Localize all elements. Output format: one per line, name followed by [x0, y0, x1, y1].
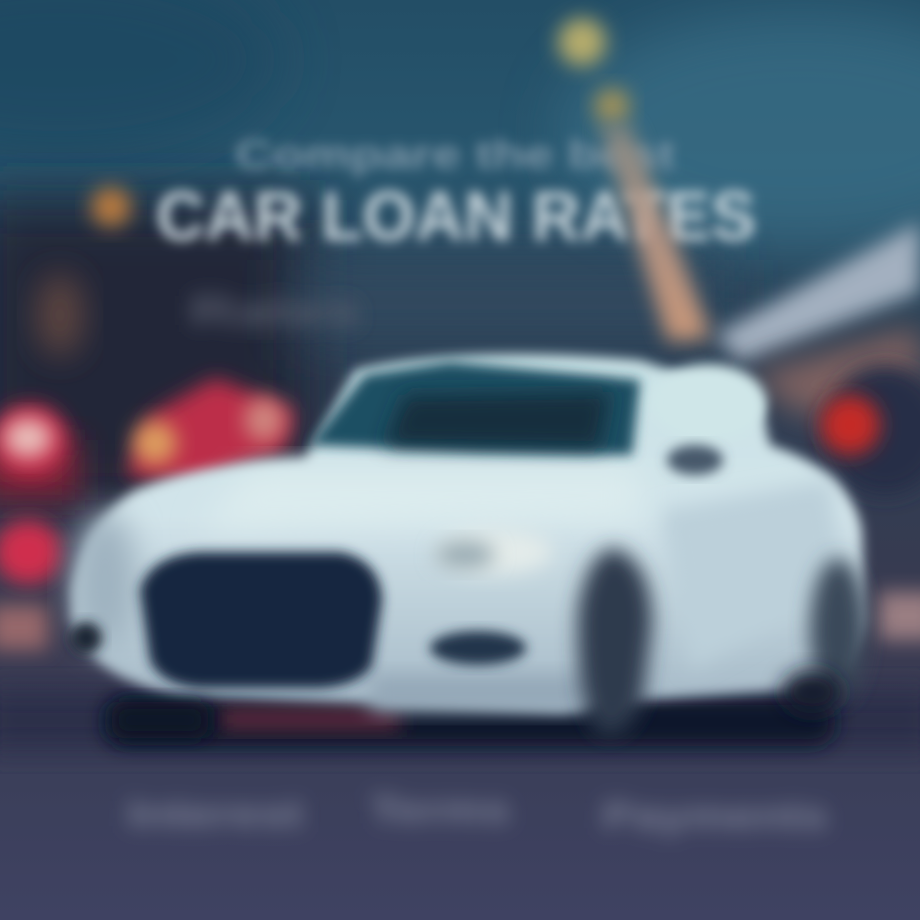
lower bumper shade — [370, 675, 590, 711]
title top line: Compare the best — [235, 133, 675, 177]
side mirror and pillar glow — [650, 364, 766, 440]
windshield — [310, 362, 640, 455]
car — [70, 354, 866, 746]
left fender shade — [73, 510, 137, 650]
front wheel — [578, 548, 652, 735]
orange light beam — [600, 125, 712, 342]
title subtext: Rates — [190, 287, 360, 334]
title main line: CAR LOAN RATES — [156, 177, 756, 255]
side panel shade — [660, 480, 845, 670]
right building glow — [750, 325, 920, 415]
icon: second yellow light — [594, 88, 630, 124]
central red car lights — [125, 378, 295, 485]
label one: Interest — [128, 793, 303, 834]
red reflection under bumper — [220, 708, 400, 730]
icon: left amber light — [36, 273, 84, 357]
pale road glow — [0, 605, 48, 650]
body brightening stripe — [200, 470, 640, 530]
title — [156, 133, 756, 334]
icon: top yellow light — [558, 18, 606, 66]
headlight — [437, 530, 553, 574]
right diagonal light streak — [715, 222, 920, 362]
right background car — [820, 365, 920, 640]
red light lower — [0, 520, 62, 584]
red light upper — [0, 404, 68, 476]
car shadow — [105, 698, 835, 746]
label two: Terms — [370, 789, 510, 830]
fog lamp left — [70, 622, 102, 654]
left red lights — [0, 404, 80, 650]
mirror dark — [667, 445, 723, 475]
bottom labels — [128, 789, 828, 836]
windshield dark centre — [385, 392, 610, 448]
label three: Payments — [602, 795, 828, 836]
car body — [72, 354, 865, 712]
lower intake — [430, 631, 526, 665]
icon: orange dot — [91, 187, 131, 227]
rear wheel — [810, 558, 866, 702]
grille — [140, 552, 382, 688]
front wheel base — [112, 702, 208, 738]
dark red halo — [0, 440, 80, 500]
